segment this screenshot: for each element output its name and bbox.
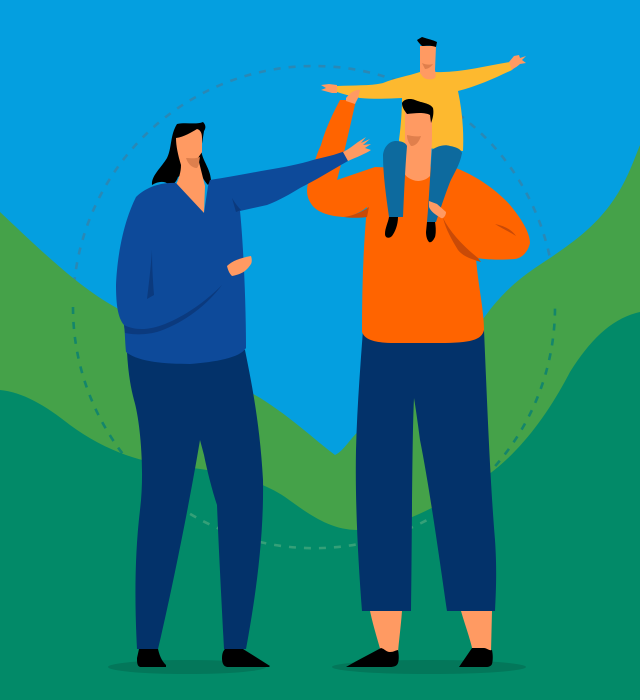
man: elbow crease [495,224,516,236]
child: right shoe [426,222,436,242]
woman: lower hand [227,256,252,276]
woman: left shoe [137,649,166,667]
background: dark green foreground hill [0,312,640,700]
woman: arm crease [124,285,222,334]
man: right bare leg [461,611,492,652]
child: face and neck [420,46,436,79]
child: right leg [427,145,462,222]
child: sweater [337,62,512,151]
man: neck shadow [407,135,421,146]
man: underarm shadow [443,218,481,262]
man: hand on child's shin [429,201,446,218]
man: hair [402,99,433,123]
woman: raised hand [343,137,371,161]
woman: armpit shadow [232,198,241,212]
man: raised hand [346,90,360,104]
background: dashed circle on sky [73,66,555,548]
woman: hair [152,122,211,185]
background: dashed circle on dark green [143,477,485,548]
background: dashed circle on light green [73,307,555,477]
child: right hand [509,55,526,70]
child: left hand [321,84,337,93]
woman: trousers [127,350,263,649]
figure: man and child [307,37,530,667]
child: left shoe [385,217,398,238]
woman: neck shadow [186,157,200,168]
man: face and neck [404,110,432,181]
background: light green hills [0,145,640,700]
ground shadow: man [332,660,526,674]
man: right shoe [459,648,493,667]
woman: sweater [116,151,348,364]
man: left shoe [346,648,399,667]
child: left leg [383,141,407,217]
child: hair [417,37,437,47]
woman: face and neck [176,129,205,213]
ground shadow: woman [108,660,266,674]
man: left underarm shadow [344,207,369,218]
man: trousers [356,330,496,611]
figure: woman [116,122,371,667]
man: left bare leg [370,611,402,652]
woman: right shoe [222,649,270,667]
child: neck shadow [422,63,433,69]
man: sweater [307,100,530,343]
woman: sweater fold [147,250,154,299]
